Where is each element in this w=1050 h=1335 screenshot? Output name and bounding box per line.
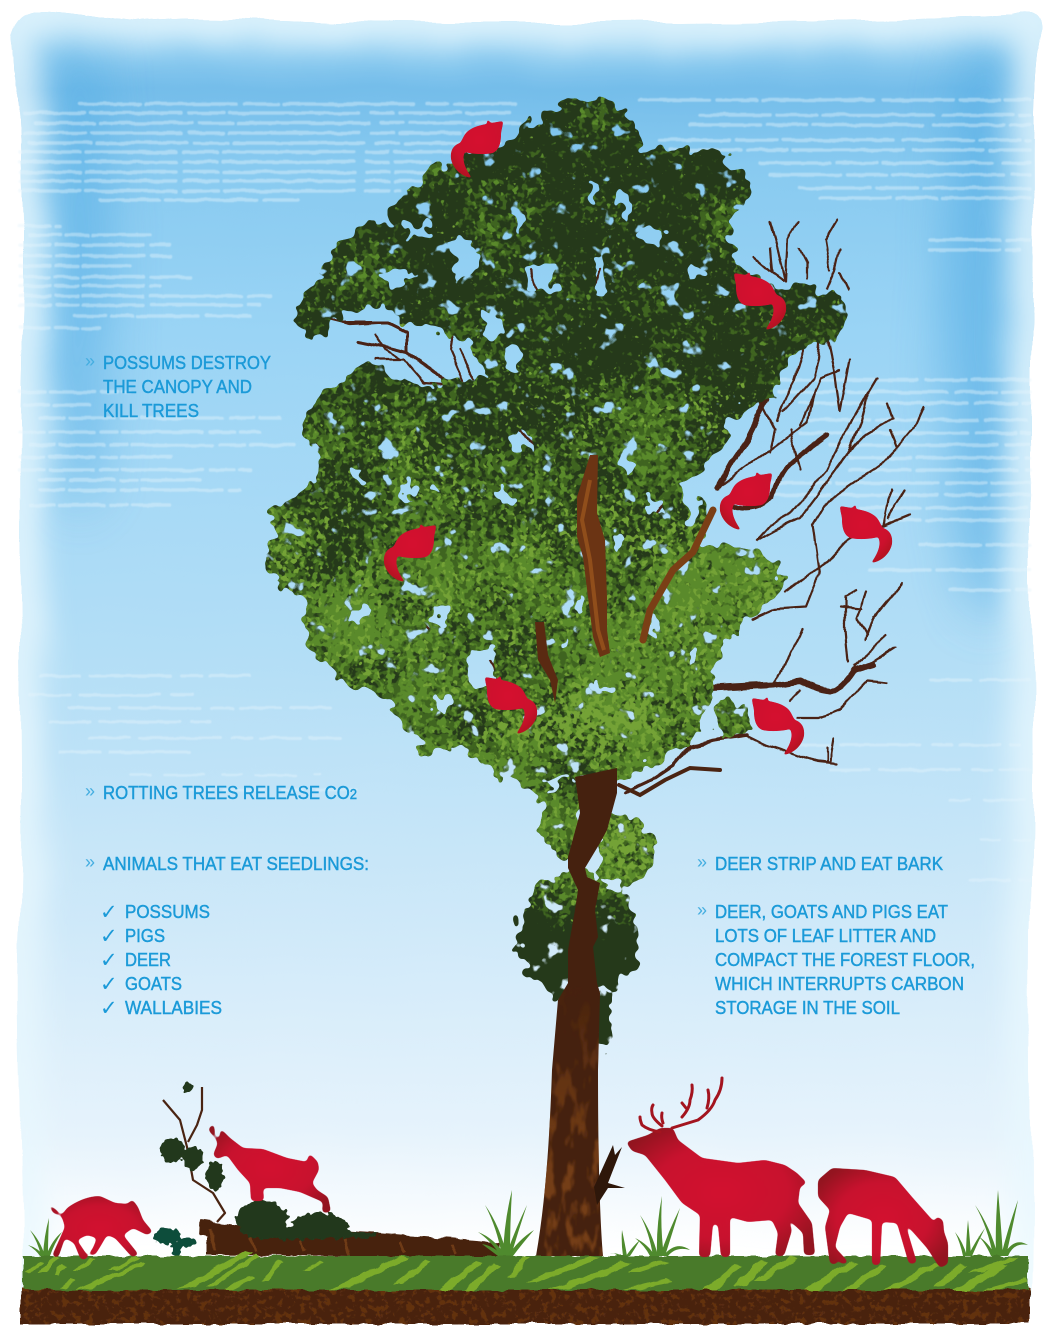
possum: top of canopy bbox=[451, 119, 503, 178]
text: leaf litter and soil carbon: DEER, GOATS AND PIGS EAT bbox=[715, 901, 948, 922]
seedling on log bbox=[160, 1084, 225, 1222]
canopy light-green mottling bbox=[266, 103, 840, 922]
text: possums destroy the canopy: THE CANOPY AND bbox=[103, 376, 252, 397]
stag silhouette bbox=[626, 1078, 815, 1257]
ground: soil bbox=[20, 1288, 1030, 1324]
doe silhouette bbox=[818, 1168, 948, 1268]
checklist of animals: DEER bbox=[125, 949, 171, 970]
thick dead limbs bbox=[710, 400, 873, 692]
pig silhouette bbox=[47, 1196, 153, 1260]
text: possums destroy the canopy: » bbox=[85, 351, 95, 371]
checklist of animals: ✓ bbox=[100, 948, 118, 972]
text: animals that eat seedlings: ANIMALS THAT EAT SEEDLINGS: bbox=[103, 853, 369, 874]
canopy dark base bbox=[265, 97, 855, 1050]
text: rotting trees: ROTTING TREES RELEASE CO2 bbox=[103, 782, 357, 803]
checklist of animals: ✓ bbox=[100, 900, 118, 924]
checklist of animals: WALLABIES bbox=[125, 997, 222, 1018]
text: leaf litter and soil carbon: » bbox=[697, 900, 707, 920]
text: leaf litter and soil carbon: STORAGE IN THE SOIL bbox=[715, 997, 900, 1018]
checklist of animals: ✓ bbox=[100, 924, 118, 948]
checklist of animals: POSSUMS bbox=[125, 901, 210, 922]
text: deer strip bark: DEER STRIP AND EAT BARK bbox=[715, 853, 944, 874]
tree: bare branches bbox=[300, 220, 923, 792]
possum: lower canopy bbox=[485, 675, 537, 734]
possum: right twig bbox=[840, 504, 892, 563]
possum: on thick limb bbox=[720, 471, 772, 530]
canopy mid-green mottling bbox=[266, 97, 844, 932]
moss on the log bbox=[236, 1201, 385, 1240]
checklist of animals bbox=[100, 900, 222, 1020]
grass tufts bbox=[28, 1190, 1028, 1256]
text: possums destroy the canopy: KILL TREES bbox=[103, 400, 199, 421]
possum: upper right bbox=[734, 271, 786, 330]
text: rotting trees: » bbox=[85, 781, 95, 801]
text: leaf litter and soil carbon: WHICH INTERRUPTS CARBON bbox=[715, 973, 964, 994]
text: leaf litter and soil carbon: LOTS OF LEAF LITTER AND bbox=[715, 925, 936, 946]
checklist of animals: ✓ bbox=[100, 996, 118, 1020]
text: possums destroy the canopy bbox=[85, 351, 271, 421]
tree trunk bbox=[536, 768, 617, 1256]
possum: left canopy bbox=[384, 523, 436, 582]
text: animals that eat seedlings: » bbox=[85, 852, 95, 872]
possum: lower right branch bbox=[752, 696, 804, 755]
goat silhouette bbox=[208, 1123, 331, 1213]
fallen log bbox=[199, 1220, 500, 1257]
tree: upper trunk limbs bbox=[535, 455, 720, 795]
text: leaf litter and soil carbon bbox=[697, 900, 975, 1018]
checklist of animals: ✓ bbox=[100, 972, 118, 996]
ground: grass strip bbox=[22, 1251, 1028, 1290]
text: possums destroy the canopy: POSSUMS DESTROY bbox=[103, 352, 271, 373]
small teal bush bbox=[153, 1228, 197, 1256]
thin dead twigs bbox=[300, 220, 923, 792]
text: leaf litter and soil carbon: COMPACT THE FOREST FLOOR, bbox=[715, 949, 975, 970]
checklist of animals: GOATS bbox=[125, 973, 182, 994]
tree: canopy foliage bbox=[265, 96, 848, 1054]
sky streaks: white brush lines bbox=[20, 100, 1030, 880]
checklist of animals: PIGS bbox=[125, 925, 165, 946]
canopy olive mottling bbox=[265, 96, 847, 940]
stag antlers bbox=[640, 1078, 722, 1132]
text: deer strip bark: » bbox=[697, 852, 707, 872]
broken stub on trunk bbox=[594, 1145, 625, 1205]
